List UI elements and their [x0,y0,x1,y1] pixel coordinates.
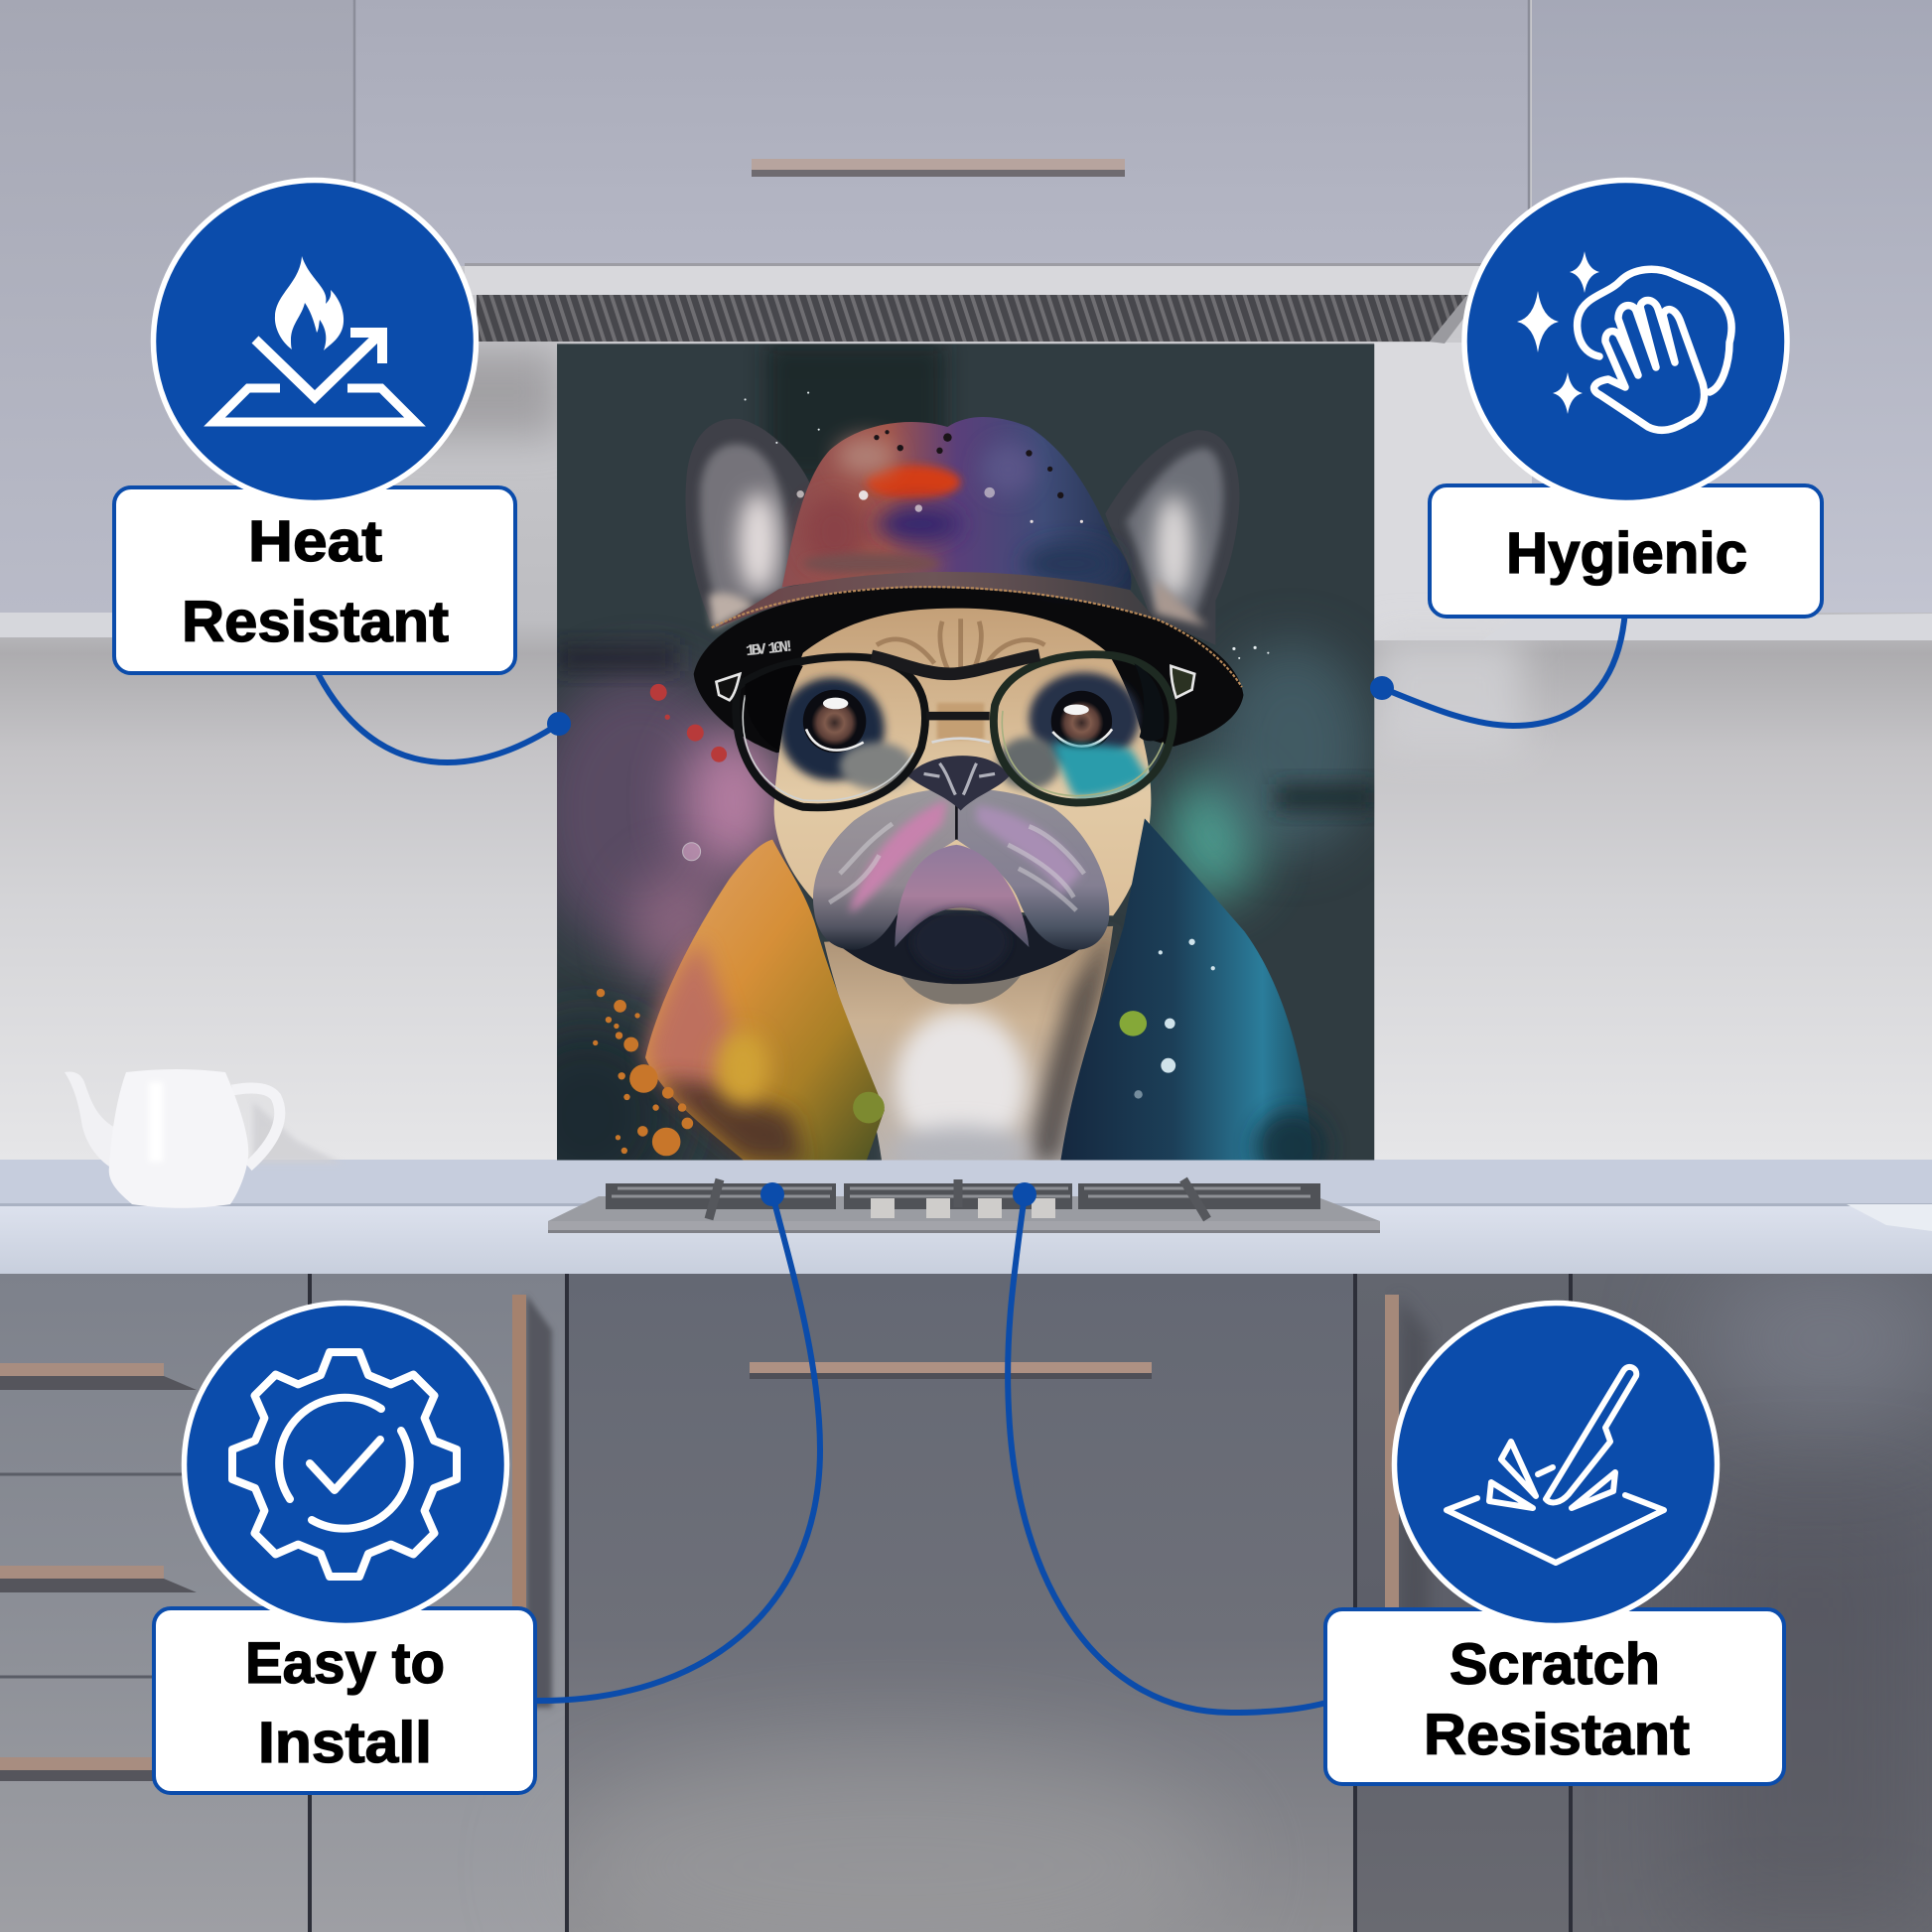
jacket hem shadow [1255,1110,1328,1183]
connector line: Heat Resistant [315,667,571,762]
scarf bottom shade [656,1078,803,1162]
icon: gear with check mark [232,1352,457,1577]
scarf gold splash [716,1032,768,1105]
label: Easy to Install: Install [258,1711,432,1775]
cabinet ledge left [0,613,357,637]
wall bright patch beside hood, right [1374,343,1533,640]
upper right cabinet [1532,0,1932,613]
nose highlights [924,763,995,795]
icon: shard left [1489,1482,1533,1508]
hob knobs [871,1198,1055,1218]
hat brim stitching [712,587,1242,687]
vertical handle left [512,1295,552,1708]
label: Scratch Resistant [1325,1609,1784,1784]
wall light strip right of panel [1374,635,1523,755]
upper center cabinet [354,0,1529,266]
label: Scratch Resistant: Scratch [1449,1632,1660,1697]
jacket [1060,818,1312,1162]
icon: knife [1546,1367,1636,1502]
check mark [310,1440,380,1490]
teapot spout [65,1071,124,1172]
teal reflection in right lens [1052,743,1150,797]
label: Easy to Install: Easy to [245,1631,445,1696]
left eye patch [779,678,885,780]
gear outline [232,1352,457,1577]
center lip [895,845,1029,947]
chin [893,963,1029,1004]
icon: surface plane [1447,1495,1664,1563]
hat crown [782,417,1131,595]
center cabinet handle [750,1362,1152,1379]
icon: surface plane [214,388,415,422]
icon badge: heat resistant [153,181,477,502]
label: Heat Resistant: Heat [248,509,382,574]
right eye patch [1029,672,1140,764]
icon badge: easy to install [185,1303,506,1626]
scarf pink shade [645,942,735,1105]
nose groove [954,795,959,840]
drawer handle 1 [0,1363,197,1390]
burner grate left [606,1179,836,1219]
forehead wrinkles [877,619,1044,669]
icon: cloth outline [1578,269,1731,392]
chest white fur [895,1011,1027,1158]
nose bridge fur [937,703,984,740]
burner grate center [844,1179,1072,1209]
icon: arrow bouncing off surface [255,333,382,397]
burner grate right [1078,1179,1320,1219]
splashback glass panel with dog artwork [557,344,1374,1160]
kitchen counter [0,1160,1932,1274]
background glows [498,344,1376,1210]
jacket green blot [1120,1011,1147,1036]
label: Scratch Resistant: Resistant [1424,1703,1690,1767]
label: Easy to Install [154,1608,535,1793]
label: Hygienic [1430,485,1822,617]
teapot highlight [149,1082,163,1162]
teapot shadow [253,1102,343,1164]
jacket speckles [1134,939,1215,1099]
upper cabinet handle [752,159,1125,177]
label: Heat Resistant: Resistant [182,590,449,654]
white speckles upper right [745,392,1269,659]
cabinet ledge right [1482,614,1932,640]
connector line: Easy to Install [534,1182,820,1701]
fold wrinkles [829,824,1084,910]
bubble [683,843,701,861]
cabinet door gaps [354,0,1529,266]
vertical handle right [1385,1295,1430,1688]
left ear [685,419,809,629]
chest shadow right [1029,926,1113,1162]
wall shadow patch beside hood, left [397,347,561,437]
under right eye fur [998,737,1060,789]
under left eye fur [840,743,913,789]
teapot handle [232,1088,280,1167]
label: Hygienic: Hygienic [1506,521,1747,586]
red droplets [650,684,727,762]
drawer handle 3 [0,1757,159,1781]
nose [908,756,1009,810]
hat brim [694,588,1243,753]
pink fold left [850,800,947,913]
hat speckles [874,430,1063,498]
left lens brim reflection [745,665,803,751]
left eye [803,690,866,753]
icon: shard top [1501,1442,1536,1496]
dark under-mouth [835,915,1089,984]
lower cabinets [0,1261,1932,1932]
orange splashes [593,989,693,1156]
connector line: Hygienic [1370,611,1625,726]
connector line: Scratch Resistant [1008,1182,1326,1713]
glasses [716,654,1194,807]
pink fold right [977,805,1081,895]
right ear [1105,430,1240,645]
drawer handle 2 [0,1566,197,1592]
panel background [556,338,1376,1162]
left jowl flap [813,789,956,950]
icon: sparkles [1517,251,1599,414]
face [774,609,1151,915]
right lens brim reflection [1134,663,1165,741]
inner ring arcs [279,1398,410,1529]
upper left cabinet [0,0,354,613]
hat brim text: 1BV 10N! [745,637,795,660]
mouth shadow [912,909,1009,975]
scarf olive blot [853,1092,885,1123]
chest lower fur [893,1126,1029,1178]
wall tiles [0,338,1932,1172]
icon: dash [1538,1467,1553,1474]
icon: shard right [1572,1472,1615,1508]
label: Heat Resistant [114,487,515,673]
scarf [645,840,885,1162]
icon badge: scratch resistant [1394,1303,1718,1626]
icon: hand [1594,300,1705,430]
teapot body [109,1069,248,1208]
gas hob [548,1179,1380,1233]
hat band [714,572,1156,629]
icon badge: hygienic [1464,181,1787,502]
icon: flame [275,256,344,350]
right eye [1051,691,1112,752]
extractor hood [465,263,1481,344]
neck and chest [824,926,1113,1162]
teapot [65,1069,343,1208]
right jowl flap [956,789,1109,950]
